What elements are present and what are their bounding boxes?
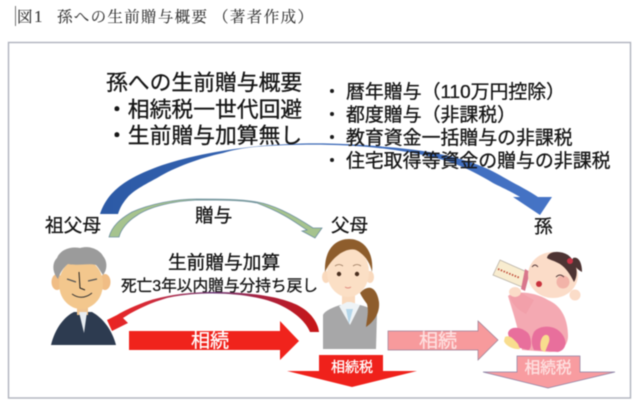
icon: grandfather [51,247,116,345]
arrow: inheritance to grandchild [388,321,498,360]
list: gift types [330,81,611,172]
figure title: 孫への生前贈与概要 [57,8,207,26]
heading: overview: ・相続税一世代回避 [106,97,302,122]
label: three-year add-back: 死亡3年以内贈与分持ち戻し [121,277,318,295]
arrow: gift to parents [109,199,322,238]
icon: baby [493,252,582,352]
label: parents: 父母 [331,215,368,236]
label: grandchild: 孫 [534,216,553,237]
figure title [15,6,313,26]
heading: overview [106,70,302,148]
list: gift types: 住宅取得等資金の贈与の非課税 [346,150,611,172]
arrow: inheritance to parents: 相続 [191,330,229,352]
arrow: inheritance to grandchild: 相続 [419,330,457,352]
label: grandparents: 祖父母 [45,215,101,236]
arrow: add-back [107,292,319,332]
list: gift types: 教育資金一括贈与の非課税 [346,127,573,149]
icon: mother [322,239,379,349]
arrow: inheritance to parents [129,321,299,360]
arrow: parents inheritance tax: 相続税 [331,359,373,375]
arrow: grandparents to grandchild [100,143,552,215]
label: lifetime gift addition: 生前贈与加算 [168,252,280,273]
arrow: grandchild inheritance tax [483,356,615,388]
heading: overview: ・生前贈与加算無し [106,123,302,148]
figure title: 図1 [17,7,43,26]
label: gift: 贈与 [195,205,232,226]
list: gift types: 暦年贈与（110万円控除） [346,81,565,103]
arrow: parents inheritance tax [287,355,417,387]
arrow: grandchild inheritance tax: 相続税 [524,359,572,377]
list: gift types: 都度贈与（非課税） [346,104,516,126]
figure title: （著者作成） [213,8,313,26]
heading: overview: 孫への生前贈与概要 [106,70,302,95]
